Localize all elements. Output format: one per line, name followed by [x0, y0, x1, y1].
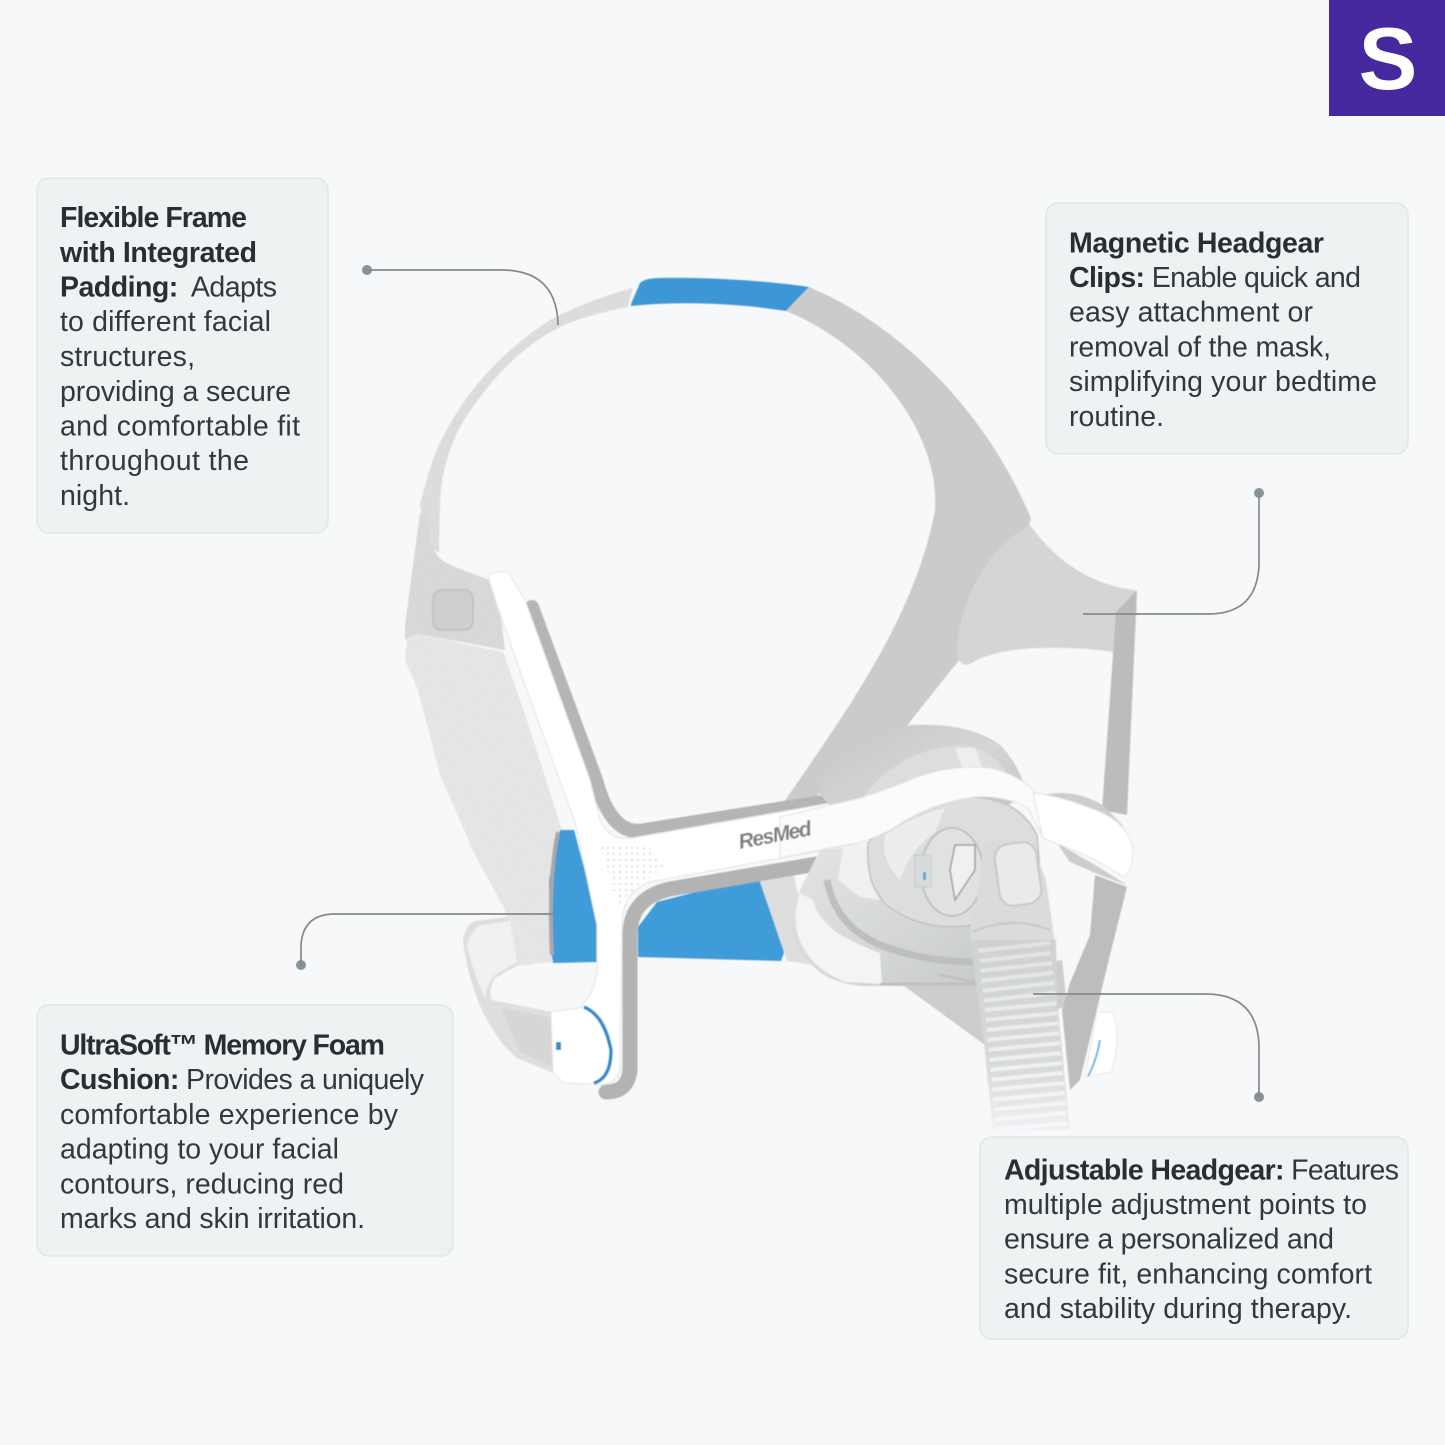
panel: UltraSoft memory foam cushion: UltraSoft™ Memory Foam [60, 1030, 385, 1062]
right connector tab [957, 525, 1137, 665]
fabric above right band [1043, 793, 1125, 828]
blue crown patch [631, 278, 809, 311]
panel: magnetic headgear clips: routine. [1069, 401, 1164, 433]
blue foam right [638, 876, 785, 961]
panel: UltraSoft memory foam cushion: adapting to your facial [60, 1134, 339, 1166]
panel: magnetic headgear clips: easy attachment or [1069, 296, 1314, 328]
panel: flexible frame: providing a secure [60, 376, 291, 408]
panel: UltraSoft memory foam cushion: comfortable experience by [60, 1099, 399, 1131]
panel: adjustable headgear: ensure a personalized and [1004, 1224, 1334, 1256]
callout line: adjustable headgear [1033, 994, 1264, 1102]
right white frame band [1033, 793, 1133, 877]
perforation dots [600, 845, 665, 905]
lower loop strap [463, 917, 558, 1075]
ribbed air tube [970, 923, 1070, 1130]
panel: adjustable headgear [980, 1137, 1408, 1339]
right lower frame [1062, 875, 1127, 1090]
size badge S [1329, 0, 1445, 116]
panel: flexible frame: Flexible Frame [60, 202, 247, 234]
panel: flexible frame: and comfortable fit [60, 410, 300, 442]
white top strap [780, 767, 1041, 858]
left magnetic clip [551, 1007, 612, 1084]
blue foam left [549, 830, 598, 963]
panel: magnetic headgear clips: Clips: Enable quick and [1069, 262, 1361, 294]
cushion [790, 840, 1000, 986]
right headgear band [782, 287, 1031, 815]
fabric behind cushion [758, 860, 815, 965]
callout line: magnetic clips [1083, 488, 1264, 614]
panel: flexible frame [37, 178, 328, 533]
tube elbow [970, 840, 1056, 975]
panel: flexible frame: structures, [60, 341, 195, 373]
panel: flexible frame: Padding: Adapts [60, 272, 277, 304]
size badge S: S [1359, 9, 1417, 108]
panel: adjustable headgear: Adjustable Headgear: Features [1004, 1154, 1399, 1186]
lens highlight [884, 808, 945, 880]
inner frame trim [532, 607, 860, 831]
left lower strap [405, 634, 562, 966]
elbow textured pad [993, 840, 1043, 908]
right vertical strap [1102, 590, 1137, 815]
panel: magnetic headgear clips: simplifying your bedtime [1069, 366, 1377, 398]
panel: UltraSoft memory foam cushion [37, 1005, 453, 1256]
ResMed logo text: ResMed [737, 817, 815, 854]
clear dome [818, 725, 1027, 840]
panel: UltraSoft memory foam cushion: contours, reducing red [60, 1168, 344, 1200]
panel: adjustable headgear: multiple adjustment points to [1004, 1189, 1367, 1221]
panel: magnetic headgear clips [1046, 203, 1408, 454]
lower gray base [900, 960, 1067, 1045]
panel: magnetic headgear clips: Magnetic Headgear [1069, 228, 1324, 260]
fabric below right band [1057, 843, 1127, 885]
cushion white pad [796, 893, 882, 984]
dome glare [955, 748, 985, 775]
lens body [868, 797, 1040, 927]
callout line: flexible frame [362, 265, 558, 325]
panel: magnetic headgear clips: removal of the mask, [1069, 332, 1331, 364]
cushion contours [827, 880, 975, 984]
dome inner highlight [862, 745, 1013, 800]
headgear top arch [420, 288, 633, 553]
panel: adjustable headgear: and stability during therapy. [1004, 1293, 1352, 1325]
right clip [1085, 1012, 1117, 1077]
panel: UltraSoft memory foam cushion: Cushion: Provides a uniquely [60, 1064, 425, 1096]
panel: flexible frame: with Integrated [59, 237, 257, 269]
panel: adjustable headgear: secure fit, enhancing comfort [1004, 1258, 1372, 1290]
panel: flexible frame: throughout the [60, 445, 249, 477]
callout line: memory foam cushion [296, 914, 555, 970]
panel: UltraSoft memory foam cushion: marks and skin irritation. [60, 1203, 365, 1235]
side highlight [838, 845, 880, 900]
panel: flexible frame: to different facial [60, 306, 271, 338]
center swivel ring [915, 828, 983, 916]
mask illustration [405, 278, 1137, 1130]
white frame [488, 572, 880, 1085]
lower frame trim [606, 860, 840, 1092]
left side adjuster tab [405, 513, 505, 650]
panel: flexible frame: night. [60, 480, 130, 512]
stitched edge [551, 832, 558, 955]
